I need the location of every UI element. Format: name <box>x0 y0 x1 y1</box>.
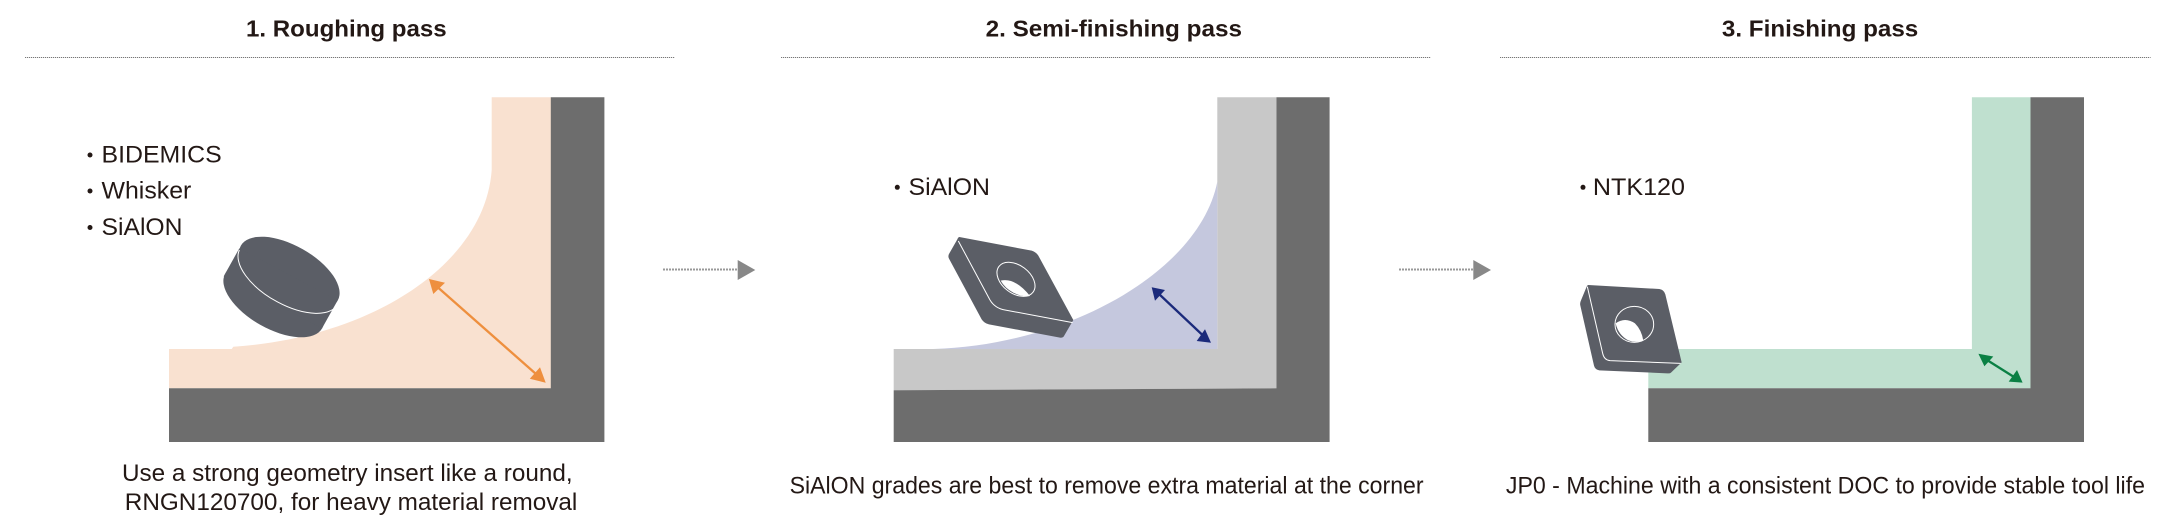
workpiece: dark L shape <box>894 97 1330 442</box>
heading: semi-finishing pass: 2. Semi-finishing pass <box>986 16 1242 42</box>
panel: semi-finishing pass <box>781 16 1431 499</box>
caption: Use a strong geometry insert like a round, <box>122 460 573 487</box>
arrow: depth of cut, green <box>1978 354 2023 383</box>
caption <box>122 460 577 516</box>
material to remove: peach area <box>169 97 551 388</box>
heading: roughing pass: 1. Roughing pass <box>246 16 447 42</box>
grade list: NTK120 <box>1593 174 1685 201</box>
grade list: Whisker <box>102 178 191 204</box>
arrow: corner stock, navy <box>1152 287 1211 343</box>
workpiece: dark L shape <box>169 97 604 442</box>
arrow: semi-finishing to finishing <box>1399 260 1491 280</box>
icon: diamond insert <box>948 237 1073 338</box>
grade list: BIDEMICS <box>102 142 222 168</box>
panel: finishing pass <box>1500 16 2151 499</box>
grade list: SiAlON <box>102 214 182 241</box>
caption: RNGN120700, for heavy material removal <box>125 489 577 516</box>
arrow: depth of cut, orange <box>429 279 546 383</box>
grade list <box>88 142 222 241</box>
grade list: SiAlON <box>908 174 990 201</box>
corner material: lavender area <box>933 182 1217 349</box>
finishing stock: green L shape <box>1648 97 2030 388</box>
caption: JP0 - Machine with a consistent DOC to provide stable tool life <box>1506 472 2145 499</box>
heading: finishing pass: 3. Finishing pass <box>1722 16 1918 42</box>
icon: square insert <box>1580 285 1682 373</box>
icon: round insert RNGN <box>212 222 351 352</box>
workpiece: dark L shape <box>1648 97 2084 442</box>
caption: SiAlON grades are best to remove extra material at the corner <box>790 472 1424 499</box>
finish allowance: gray L shape <box>894 97 1276 390</box>
panel: roughing pass <box>25 16 675 516</box>
arrow: roughing to semi-finishing <box>663 260 755 280</box>
